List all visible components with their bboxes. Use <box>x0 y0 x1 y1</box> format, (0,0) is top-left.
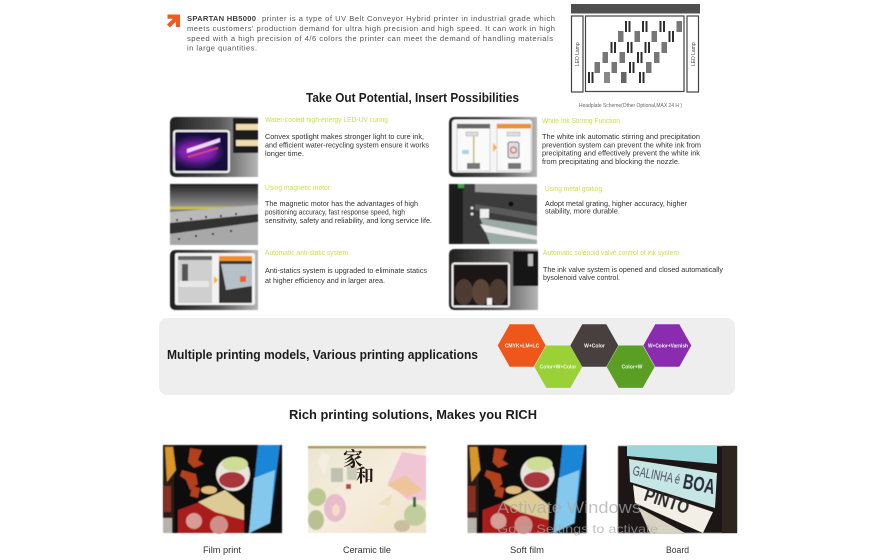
photo: magnetic motor <box>170 184 258 245</box>
feature text: magnetic motor: positioning accuracy, fast response speed, high <box>265 208 405 216</box>
feature text: solenoid valve: bysolenoid valve control. <box>543 273 620 282</box>
ceramic tile calligraphy: 家 <box>343 447 363 471</box>
diagram: headplate scheme: LED Lamp <box>575 42 581 66</box>
feature text: anti-static system: Anti-statics system is upgraded to eliminate statics <box>265 266 427 275</box>
feature text: anti-static system: Automatic anti-static system <box>265 250 348 257</box>
diagram: headplate scheme: LED Lamp <box>691 42 697 66</box>
hexagon: Color+W+Color: Color+W+Color <box>540 364 576 370</box>
feature text: metal grating: stability, more durable. <box>545 206 620 216</box>
feature text: white ink stirring: from precipitating and blocking the nozzle. <box>542 157 680 166</box>
hexagon: Color+W <box>607 346 655 388</box>
intro text block: printer is a type of UV Belt Conveyor Hybrid printer in industrial grade which <box>262 14 555 23</box>
intro text block: speed with a high precision of 4/6 colors the printer can meet the demand of handling materials <box>187 34 553 43</box>
hexagon: W+Color: W+Color <box>584 344 605 350</box>
feature text: solenoid valve <box>543 250 723 282</box>
caption: film print: Film print <box>203 545 241 555</box>
feature text: white ink stirring: precipitating and effectively prevent the white ink <box>542 148 700 158</box>
ceramic tile calligraphy: 和 <box>356 466 374 486</box>
watermark: activate windows <box>497 498 658 536</box>
panel heading: Multiple printing models, Various printing applications <box>167 347 478 362</box>
hexagon: CMYK+LM+LC: CMYK+LM+LC <box>505 344 540 350</box>
feature text: LED-UV curing: Convex spotlight makes stronger light to cure ink, <box>265 132 424 141</box>
feature text: white ink stirring: prevention system can prevent the white ink from <box>542 140 701 150</box>
feature text: magnetic motor: Using magnetic motor <box>265 185 331 192</box>
photo: solenoid valve <box>449 249 538 310</box>
hexagon: W+Color+Varnish: W+Color+Varnish <box>648 344 688 350</box>
photo: ceramic tile <box>308 446 426 533</box>
intro text block: in large quantities. <box>187 44 257 52</box>
icon: orange arrow <box>167 14 180 28</box>
photo: board: GALINHA é <box>631 462 682 487</box>
ceramic tile calligraphy <box>343 447 374 486</box>
photo: white ink stirring <box>449 117 537 177</box>
photo: LED-UV curing <box>170 117 258 177</box>
feature text: metal grating: Adopt metal grating, higher accuracy, higher <box>545 199 687 208</box>
photo: metal grating <box>449 184 537 244</box>
hexagon: Color+W+Color <box>534 346 582 388</box>
feature text: anti-static system: at higher efficiency and in larger area. <box>265 276 385 285</box>
feature text: solenoid valve: The ink valve system is opened and closed automatically <box>543 265 723 274</box>
feature text: metal grating <box>545 186 687 216</box>
feature text: LED-UV curing: longer time. <box>265 149 304 158</box>
hexagon: W+Color+Varnish <box>643 324 691 367</box>
caption: ceramic tile: Ceramic tile <box>343 545 391 555</box>
watermark: activate windows: Activate Windows <box>497 498 641 517</box>
diagram caption: Headplate Scheme(Other Optional,MAX 24 H ) <box>579 103 682 109</box>
diagram: headplate scheme <box>571 4 700 92</box>
caption: board: Board <box>666 545 689 555</box>
hexagon: W+Color <box>570 324 618 367</box>
feature text: metal grating: Using metal grating <box>545 186 602 193</box>
hexagon: CMYK+LM+LC <box>498 324 546 367</box>
photo: anti-static system <box>170 250 258 310</box>
photo: board: BOA <box>681 470 717 499</box>
feature text: LED-UV curing: Water-cooled high-energy LED-UV curing <box>265 117 388 124</box>
feature text: white ink stirring: The white ink automatic stirring and precipitation <box>542 132 700 141</box>
feature text: white ink stirring <box>542 118 701 166</box>
intro text block: meets customers' production demand for ultra high precision and high speed. It can work in high <box>187 24 555 33</box>
panel: printing models <box>159 318 735 395</box>
intro text block <box>187 14 555 52</box>
feature text: white ink stirring: White Ink Stirring Function <box>542 118 620 125</box>
photo: soft film <box>468 445 586 534</box>
photo: board <box>618 446 737 533</box>
feature text: magnetic motor: The magnetic motor has the advantages of high <box>265 199 418 208</box>
photo: board: PINTO <box>642 485 692 518</box>
feature text: magnetic motor <box>265 185 432 225</box>
feature text: anti-static system <box>265 250 427 285</box>
watermark: activate windows: Go to Settings to activate <box>497 522 658 536</box>
feature text: LED-UV curing: and efficient water-recycling system ensure it works <box>265 140 429 150</box>
intro text block: SPARTAN HB5000 <box>187 14 256 23</box>
photo: film print <box>163 445 282 534</box>
feature text: magnetic motor: sensitivity, safety and reliability, and long service life. <box>265 216 432 225</box>
heading: take out potential: Take Out Potential, Insert Possibilities <box>306 90 519 105</box>
heading: rich printing solutions: Rich printing solutions, Makes you RICH <box>289 407 537 422</box>
hexagon: Color+W: Color+W <box>622 364 643 370</box>
feature text: solenoid valve: Automatic solenoid valve control of ink system <box>543 250 679 257</box>
caption: soft film: Soft film <box>510 545 544 555</box>
feature text: LED-UV curing <box>265 117 429 158</box>
